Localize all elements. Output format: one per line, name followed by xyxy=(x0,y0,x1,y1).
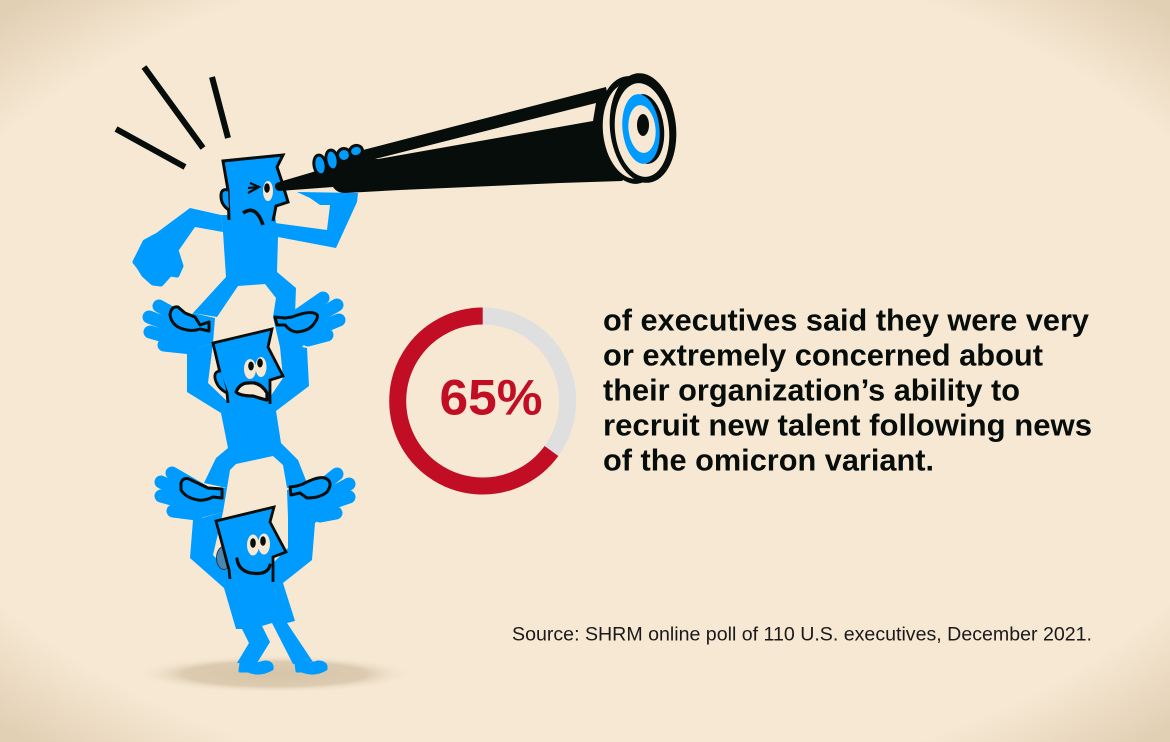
text block: description: their organization’s ability to xyxy=(603,374,1020,408)
figure: middle person xyxy=(149,298,339,500)
illustration: three stacked figures with telescope xyxy=(116,67,682,673)
icon: telescope xyxy=(275,70,682,193)
source note: Source: SHRM online poll of 110 U.S. executives, December 2021. xyxy=(512,625,1092,646)
icon: surprise lines xyxy=(116,67,228,167)
figure: bottom person xyxy=(161,473,349,673)
text block: description xyxy=(603,304,1092,477)
text block: description: or extremely concerned about xyxy=(603,339,1043,373)
stat value: 65% xyxy=(440,370,542,426)
ground shadow xyxy=(135,655,415,693)
text block: description: of executives said they were very xyxy=(603,304,1089,338)
figure: top person xyxy=(135,155,358,332)
donut chart: 65% xyxy=(398,316,568,486)
text block: description: recruit new talent following news xyxy=(603,408,1092,442)
text block: description: of the omicron variant. xyxy=(603,443,934,477)
